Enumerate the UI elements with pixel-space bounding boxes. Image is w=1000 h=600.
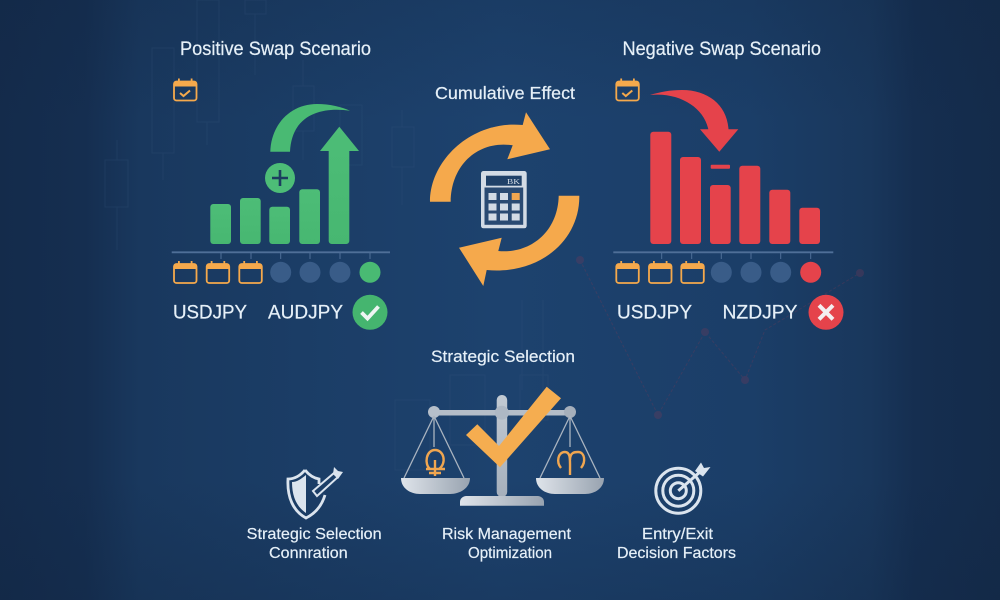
faint red line chart background: [576, 256, 864, 419]
icon: orange check mark: [466, 387, 561, 467]
icon: shield with arrow: [288, 467, 343, 518]
icon: calendar check right: [616, 78, 639, 100]
label: entry exit: Entry/Exit: [642, 526, 714, 543]
pair label: USDJPY: USDJPY: [173, 302, 247, 324]
label line two: Connration: [269, 545, 348, 562]
panel: cumulative effect: [430, 83, 579, 286]
panel: strategic selection item: [247, 467, 382, 562]
calendars row: [174, 261, 262, 283]
label: risk management: Risk Management: [442, 526, 572, 543]
green bar chart: [210, 189, 320, 244]
heading: negative swap: Negative Swap Scenario: [622, 39, 821, 60]
icon: calendar check: [174, 78, 196, 100]
pair label: USDJPY right: USDJPY: [617, 302, 692, 324]
icon: target with arrow: [656, 462, 710, 513]
panel: entry exit item: [617, 462, 736, 562]
panel: negative swap scenario: [613, 39, 844, 330]
icon: calculator: BK: [507, 178, 520, 186]
panel: strategic selection: [401, 347, 604, 506]
pair label: AUDJPY: AUDJPY: [268, 302, 343, 324]
icon: calculator: [481, 171, 527, 228]
icon: plus circle: [265, 163, 295, 193]
timeline: [172, 252, 390, 259]
red bar chart: [650, 132, 820, 244]
faint candlestick background pattern: [105, 0, 548, 470]
arrow: cycle bottom: [459, 196, 579, 286]
panel: positive swap scenario: [172, 39, 390, 330]
panel: risk management item: [442, 526, 572, 562]
heading: cumulative effect: Cumulative Effect: [435, 83, 575, 103]
heading: positive swap: Positive Swap Scenario: [180, 39, 371, 60]
icon: balance scale: [401, 395, 604, 506]
day dots: [270, 262, 380, 283]
symbol right: [558, 452, 584, 475]
arrow: up: [320, 127, 359, 244]
heading: strategic selection: Strategic Selection: [431, 347, 575, 366]
curved red arrow: [650, 90, 738, 152]
symbol left: [426, 450, 445, 476]
icon: check badge: [352, 295, 388, 330]
label: strategic selection confirmation: Strategic Selection: [247, 526, 382, 543]
day dots right: [711, 262, 821, 283]
label: optimization: Optimization: [468, 545, 552, 562]
curved green arrow: [270, 104, 350, 152]
timeline right: [613, 252, 833, 259]
calendars row right: [616, 261, 704, 283]
icon: cross badge: [808, 295, 844, 330]
arrow: cycle top: [430, 112, 550, 202]
label: decision factors: Decision Factors: [617, 545, 736, 562]
pair label: NZDJPY: NZDJPY: [722, 302, 798, 324]
